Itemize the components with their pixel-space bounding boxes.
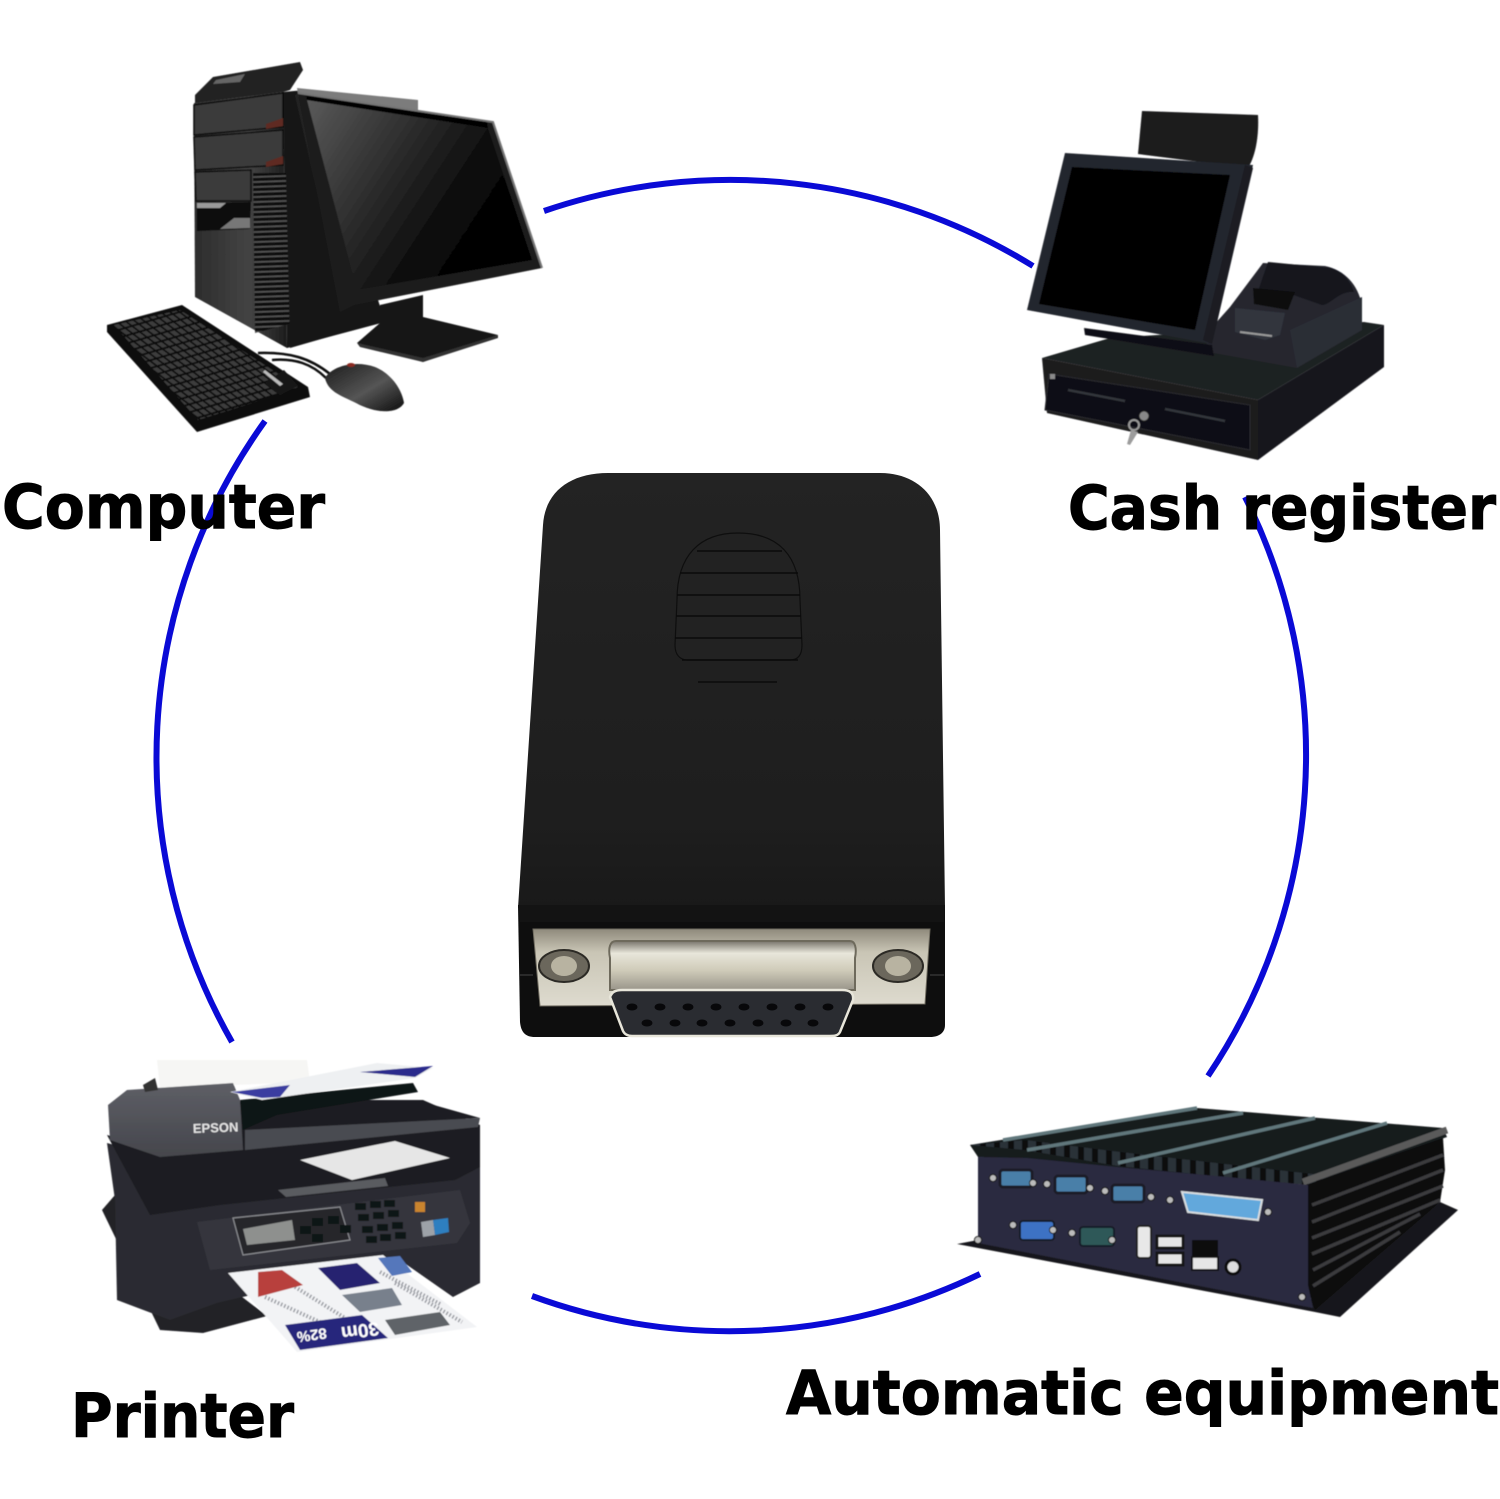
scanner lid <box>108 1083 243 1157</box>
printed figure 30m: 30m <box>340 1317 380 1343</box>
glass sheet <box>300 1141 450 1180</box>
orange button <box>415 1202 425 1212</box>
mounting foot <box>957 1202 1458 1317</box>
screw hole right <box>873 950 923 982</box>
monitor rear <box>297 88 418 122</box>
drive bays <box>194 93 283 201</box>
navy print blocks <box>318 1263 380 1290</box>
drawer lock and key <box>1139 411 1149 421</box>
cash drawer side <box>1258 325 1384 460</box>
brand mark: EPSON <box>193 1119 239 1136</box>
adapter front shell <box>518 905 945 1037</box>
D-sub shell <box>609 941 856 990</box>
device: printer <box>102 1060 480 1352</box>
receipt roll housing <box>1138 111 1258 168</box>
tower top cap <box>195 62 303 103</box>
body handle <box>278 1178 388 1197</box>
control panel <box>197 1190 470 1270</box>
label: Printer: Printer <box>71 1381 294 1452</box>
cash drawer front <box>1042 358 1258 460</box>
connection ring arcs <box>156 180 1306 1331</box>
adapter grip <box>675 533 802 660</box>
socket pins <box>626 1004 834 1026</box>
printed page <box>228 1255 477 1352</box>
central adapter <box>518 473 945 1037</box>
feed paper <box>157 1060 310 1088</box>
top surface <box>970 1108 1447 1185</box>
touch monitor frame <box>1027 153 1253 344</box>
tower vents <box>253 173 293 333</box>
keyboard <box>107 305 310 432</box>
LCD <box>243 1220 295 1245</box>
start buttons <box>421 1220 435 1237</box>
tower front <box>194 92 287 348</box>
tower side <box>283 90 385 348</box>
device: automatic equipment <box>957 1108 1458 1317</box>
touch monitor base <box>1084 328 1214 356</box>
device: computer <box>107 62 542 432</box>
D-sub socket <box>610 990 853 1036</box>
mouse cables <box>258 353 330 378</box>
printer body <box>107 1137 480 1320</box>
adapter top face <box>518 473 945 908</box>
document feeder <box>240 1083 418 1130</box>
drawer slots <box>1068 390 1225 421</box>
monitor bezel <box>298 93 542 312</box>
keypad <box>300 1200 406 1243</box>
side fins <box>1306 1138 1445 1310</box>
cash drawer top <box>1042 322 1384 400</box>
serial ports bottom row <box>1020 1221 1054 1240</box>
monitor screen <box>307 100 532 290</box>
label: Computer: Computer <box>2 472 325 543</box>
screw hole left <box>539 950 589 982</box>
front edge fins <box>970 1140 1330 1185</box>
fed document <box>230 1063 433 1100</box>
connector plate <box>533 929 930 1006</box>
document tray <box>245 1102 480 1130</box>
front ports band <box>197 202 251 231</box>
mouse <box>325 364 404 411</box>
screws <box>974 1174 1306 1300</box>
parallel port <box>1182 1192 1262 1220</box>
touch monitor screen <box>1039 167 1230 330</box>
base tray and lower body <box>102 1195 267 1333</box>
front panel <box>978 1157 1313 1308</box>
heat sink ribs <box>1003 1108 1387 1173</box>
monitor stand <box>357 295 498 362</box>
serial ports top row <box>1000 1170 1144 1202</box>
USB and LAN ports <box>1137 1226 1151 1258</box>
thermal printer <box>1205 263 1362 368</box>
device: cash register <box>1027 111 1384 460</box>
printed figure 82%: 82% <box>296 1324 328 1345</box>
drawer logo <box>1050 374 1055 379</box>
